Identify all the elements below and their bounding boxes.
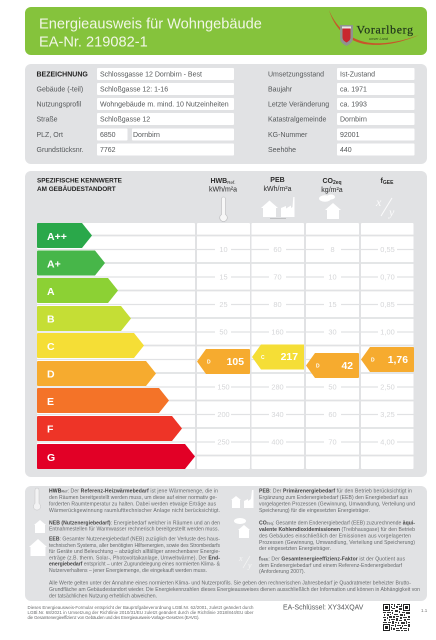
legend icon: x over y: y [247,561,252,570]
class G [37,444,195,469]
legend text: EEB: für Geräte und Beleuchtung – abzüglich allfälliger anrechenbarer Energie- [49,549,220,555]
legend text: CO2 [259,520,415,552]
legend note: der tatsächlichen Nutzung erheblich abweichen. [49,594,157,600]
scale numbers: PEB [271,245,284,446]
legend text: PEB [259,488,415,514]
scale numbers: CO2: 15 [328,300,337,309]
scale numbers: PEB: 400 [271,438,284,446]
scale numbers: PEB: 80 [273,300,282,309]
class B [37,306,131,331]
scale numbers: PEB: 60 [273,245,282,254]
class A: A [47,286,55,298]
legend text: CO2: Prozessen (Gewinnung, Umwandlung, Verteilung und Speicherung) [259,540,415,546]
legend icon: small house [34,520,46,533]
column heading: HWB: kWh/m²a [209,186,237,194]
column heading: HWB: HWB [211,178,227,185]
scale numbers: HWB [217,245,230,446]
left field values: 7762 [100,147,116,154]
legend note: Grundfläche am Gebäudestandort wieder. Die Energiekennzahlen dieses Energieausweises dienen ausschließlich der Information und können in Abhängigkeit von [49,587,420,593]
left field values: Dornbirn [133,132,160,139]
marker: fGEE 1,76 class D [361,347,414,372]
icon: thermometer [220,197,227,222]
scale numbers: CO2: 8 [330,245,335,254]
icon: house with cloud [319,194,341,219]
right field labels: Baujahr [268,86,293,94]
legend text: PEB: Speicherung) für die eingesetzten Energieträger. [259,508,370,514]
logo: Vorarlberg [329,10,419,46]
column heading: HWB: Ref. [227,180,235,185]
right field labels: Katastralgemeinde [268,116,326,124]
column heading: HWB [209,178,237,194]
title: Energieausweis für Wohngebäude [39,16,262,32]
class A+: A+ [47,258,61,270]
marker: fGEE 1,76 class D: D [371,358,375,364]
scale numbers: CO2: 60 [328,410,337,419]
class F [37,416,182,441]
scale numbers: CO2: 70 [328,438,337,446]
logo: Vorarlberg: unser Land [369,37,389,41]
scale numbers: HWB: 200 [217,410,230,419]
scale numbers: HWB: 150 [217,382,230,392]
marker: PEB 217 class C: 217 [281,352,298,363]
icon: x over y: x [375,195,382,209]
icon: x over y: y [388,205,395,219]
legend icon: house and factory [231,490,254,508]
left field values: Schloßgasse 12 [100,116,150,124]
scale numbers: HWB: 10 [219,245,228,254]
footer legal note: die Gesamtenergieeffizienz von Gebäuden und des Energieausweis-Vorlage-Gesetzes (EAVG). [28,615,200,620]
right field labels: KG-Nummer [268,132,308,139]
legend text: NEB: NEB (Nutzenergiebedarf): Energiebedarf welcher in Räumen und an den [49,520,220,526]
legend icon: large house [29,539,47,556]
right field labels [268,72,329,154]
legend text: PEB: vorgelagerten Prozessen (Gewinnung, Umwandlung, Verteilung und [259,502,415,508]
left field labels: Straße [36,116,58,124]
legend text: HWB: HWBRef: Der Referenz-Heizwärmebedarf ist jene Wärmemenge, die in [49,488,218,494]
marker: PEB 217 class C: C [261,355,265,361]
legend note: Alle Werte gelten unter der Annahme eines normierten Klima- und Nutzerprofils. Sie geben den rechnerischen Jahresbedarf je Quadratmeter beheizter Brutto- [49,580,411,586]
left field labels: PLZ, Ort [36,132,63,139]
right field values: 92001 [340,132,360,139]
icon: house and factory [261,197,294,219]
chart heading [37,178,123,193]
left field labels: Gebäude (-teil) [36,86,83,94]
legend text: CO2: der eingesetzten Energieträger. [259,546,331,552]
icon: x over y [375,195,395,219]
column heading: CO2: 2eq [333,180,342,186]
scale numbers: CO2: 30 [328,328,337,336]
footer legal note: Dieses Energieausweis-Formular entspricht der Bauprüfgabeverordnung LGBl.Nr. 62/2001, zuletzt geändert durch [28,605,254,610]
legend text: fGEE: dem Endenergiebedarf und einem Referenz-Endenergiebedarf [259,563,403,569]
scale numbers: HWB: 15 [219,272,228,282]
legend text: HWB: den Räumen bereitgestellt werden muss, um diese auf einer normativ ge- [49,495,217,501]
marker: HWB 105 class D [197,349,250,374]
legend icon: x over y: x [238,554,243,563]
legend text: EEB: EEB: Gesamter Nutzenergiebedarf (NEB) zuzüglich der Verluste des haus- [49,536,220,542]
legend text: NEB: Entnahmestellen für Warmwasser rechnerisch bereitgestellt werden muss. [49,526,219,532]
chart heading: AM GEBÄUDESTANDORT [37,185,116,193]
QR code [383,604,410,631]
right field values [340,72,375,154]
legend icon: house with cloud [234,518,250,538]
column heading: CO2: kg/m²a [321,187,343,194]
marker: fGEE 1,76 class D: 1,76 [388,355,408,366]
scale numbers: CO2: 10 [328,272,337,282]
legend text: CO2: des Gebäudes einschließlich der Emissionen aus vorgelagerten [259,534,411,540]
legend icon: thermometer [33,488,41,510]
scale numbers: fGEE: 2,50 [380,382,395,392]
class A+ [37,250,105,276]
class A [37,278,118,303]
left field values: Schloßgasse 12: 1-16 [100,86,168,94]
right field values: 440 [340,147,352,154]
scale numbers: HWB: 25 [219,300,228,309]
column heading: PEB [264,177,292,193]
marker: HWB 105 class D: D [207,360,211,366]
scale numbers: fGEE: 4,00 [380,438,395,446]
legend text: fGEE: (Anforderung 2007). [259,569,305,575]
legend text: CO2: CO2eq: Gesamte dem Endenergiebedarf (EEB) zuzurechnende äqui- [259,520,415,526]
column heading: CO2: CO [322,178,333,185]
column heading: fGEE [381,178,394,186]
marker: CO2 42 class D [306,353,359,378]
class B: B [47,314,55,326]
marker: CO2 42 class D: D [316,364,320,370]
class A++ [37,223,92,248]
column heading: PEB: kWh/m²a [264,186,292,193]
legend text: EEB: Nutzerverhaltens – jener Energiemenge, die eingekauft werden muss. [49,568,207,574]
table grid [37,223,414,469]
right field labels: Umsetzungsstand [268,72,324,78]
left field labels [36,72,88,154]
legend text: fGEE [259,556,405,575]
legend text: EEB: energiebedarf entspricht – unter Zugrundelegung eines normierten Klima- & [49,562,221,568]
class E: E [47,396,54,408]
scale numbers: fGEE: 0,70 [380,272,395,282]
legend note [49,580,420,600]
column heading: fGEE: GEE [383,180,394,186]
scale numbers: HWB: 50 [219,328,228,336]
right field labels: Letzte Veränderung [268,102,329,108]
scale numbers: fGEE: 1,00 [380,328,395,336]
panel: specific values chart [25,171,427,477]
legend text: EEB [49,536,221,574]
scale numbers: fGEE: 3,25 [380,410,395,419]
right field values: ca. 1971 [340,86,367,94]
logo: Vorarlberg: Vorarlberg [356,22,413,36]
right field values: Dornbirn [340,116,367,124]
scale numbers: fGEE [380,245,395,446]
legend text: HWB: Wärmerückgewinnung raumlufttechnischer Anlage nicht berücksichtigt. [49,508,220,514]
left field values [100,72,229,154]
class D [37,361,156,386]
scale numbers: PEB: 160 [271,328,284,336]
energy certificate number: EA-Nr. 219082-1 [39,34,148,50]
marker: HWB 105 class D: 105 [227,357,244,368]
right field labels: Seehöhe [268,147,296,154]
scale numbers: fGEE: 0,55 [380,245,395,254]
left field labels: BEZEICHNUNG [36,72,88,78]
panel: building data [25,64,427,164]
left field values: 6850 [100,132,116,139]
column heading: fGEE: f [381,178,383,185]
scale numbers: PEB: 70 [273,272,282,282]
scale numbers: fGEE: 0,85 [380,300,395,309]
marker: CO2 42 class D: 42 [341,361,353,372]
legend text: EEB: erträge (z.B. therm. Solar-, Photovoltaikanlage, Umweltwärme). Der End- [49,555,220,561]
left field values: Wohngebäude m. mind. 10 Nutzeinheiten [100,102,229,108]
class D: D [47,368,55,380]
legend text: fGEE: fGEE: Der Gesamtenergieeffizienz-Faktor ist der Quotient aus [259,556,405,562]
legend text: CO2: valente Kohlendioxidemissionen (Treibhausgase) für den Betrieb [259,527,415,533]
chart heading: SPEZIFISCHE KENNWERTE [37,178,123,184]
legend text: HWB: forderten Raumtemperatur zu halten. Dabei werden etwaige Erträge aus [49,502,216,508]
class A++: A++ [47,231,67,243]
legend text: PEB: Ergänzung zum Endenergiebedarf (EEB) den Energiebedarf aus [259,495,408,501]
left field values: Schlossgasse 12 Dornbirn - Best [100,72,202,78]
right field values: ca. 1993 [340,102,367,108]
header banner [25,7,427,55]
class C: C [47,341,55,353]
class G: G [47,452,55,464]
page number: 1.1 [421,608,428,613]
column heading: PEB: PEB [270,177,285,184]
left field labels: Grundstücksnr. [36,147,84,154]
right field values: Ist-Zustand [340,72,375,78]
column heading: CO2 [321,178,343,194]
footer legal note: LGBl.Nr. 68/2021 in Umsetzung der Richtlinie 2010/31/EU zuletzt geändert durch die Richtlinie 2018/844/EU über [28,610,254,615]
marker: PEB 217 class C [252,344,304,370]
footer legal note [28,605,254,620]
scale numbers: CO2 [328,245,337,446]
panel: legend [25,486,427,601]
class F: F [47,424,54,436]
legend icon: x over y [238,554,252,570]
scale numbers: PEB: 340 [271,410,284,419]
scale numbers: CO2: 50 [328,382,337,392]
legend text: NEB [49,520,220,532]
class C [37,333,144,358]
left field labels: Nutzungsprofil [36,102,82,108]
legend text: EEB: technischen Systems, aller benötigten Hilfsenergien, sowie des Strombedarfs [49,543,220,549]
legend text: PEB: PEB: Der Primärenergiebedarf für den Betrieb berücksichtigt in [259,488,412,494]
scale numbers: HWB: 250 [217,438,230,446]
energy class bars [37,223,195,469]
EA key: EA-Schlüssel: XY34XQAV [283,604,364,612]
scale numbers: PEB: 280 [271,382,284,392]
class E [37,388,169,413]
legend text: HWB [49,488,220,514]
